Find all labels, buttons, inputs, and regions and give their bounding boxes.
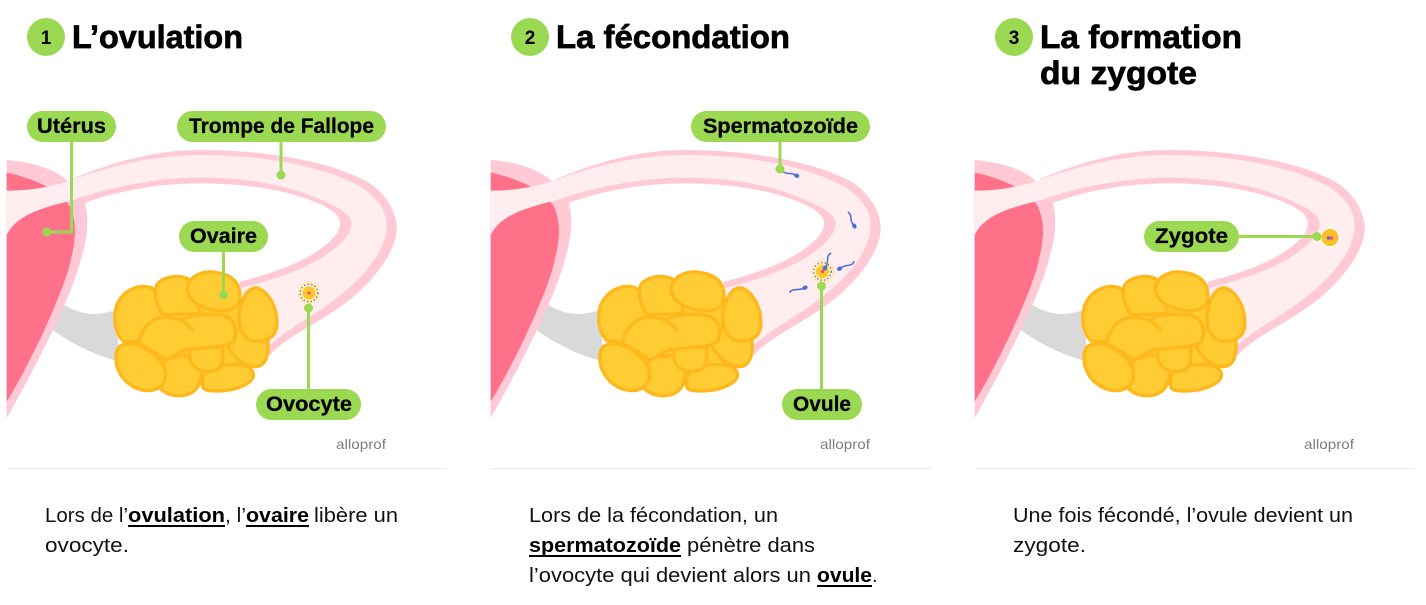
text block: zygote description: Une fois fécondé, l’ovule devient un xyxy=(1013,505,1353,527)
label: Ovaire xyxy=(179,221,268,300)
step number 1: 1 xyxy=(41,28,52,49)
text block: ovulation description: Lors de l’ xyxy=(45,505,128,527)
step number 2: 2 xyxy=(525,28,535,49)
text block: ovulation description: libère un xyxy=(314,505,398,527)
text block: ovulation description: ovocyte. xyxy=(45,535,129,557)
label: Utérus: Utérus xyxy=(37,115,106,138)
anatomy illustration: uterus, fallopian tube and ovary xyxy=(491,150,881,418)
heading: La fécondation: La fécondation xyxy=(556,19,790,55)
text block: fertilization description: ovule xyxy=(817,565,872,587)
text block: fertilization description: spermatozoïde xyxy=(529,535,681,557)
logo: alloprof: alloprof xyxy=(820,436,870,452)
label: Zygote xyxy=(1144,221,1322,252)
label: Ovule xyxy=(782,282,862,420)
text block: fertilization description: pénètre dans xyxy=(687,535,815,557)
label: Zygote: Zygote xyxy=(1155,225,1228,248)
text block: ovulation description: , l’ xyxy=(225,505,246,527)
logo: alloprof: alloprof xyxy=(336,436,386,452)
text block: zygote description: zygote. xyxy=(1013,535,1086,557)
step number 2 xyxy=(511,18,549,56)
icon: zygote xyxy=(1320,228,1340,248)
heading: La formation du zygote xyxy=(1040,19,1242,91)
panel: la fécondation xyxy=(491,18,931,587)
panel: la formation du zygote xyxy=(975,18,1415,557)
label: Spermatozoïde xyxy=(691,111,870,174)
step number 3: 3 xyxy=(1009,28,1019,49)
label: Spermatozoïde: Spermatozoïde xyxy=(703,115,858,138)
text block: ovulation description: ovaire xyxy=(246,505,309,527)
label: Utérus xyxy=(27,111,116,236)
label: Ovaire: Ovaire xyxy=(190,225,257,248)
label: Ovocyte xyxy=(256,304,361,420)
step number 3 xyxy=(995,18,1033,56)
text block: zygote description xyxy=(1013,505,1353,557)
icon: oocyte xyxy=(298,282,320,304)
text block: ovulation description xyxy=(45,505,398,557)
step number 1 xyxy=(27,18,65,56)
label: Ovule: Ovule xyxy=(793,393,851,416)
text block: ovulation description: ovulation xyxy=(128,505,225,527)
text block: fertilization description: . xyxy=(872,565,878,587)
heading: La formation du zygote: La formation xyxy=(1040,19,1242,55)
icon: spermatozoa xyxy=(783,172,856,292)
text block: fertilization description: Lors de la fécondation, un xyxy=(529,505,778,527)
text block: fertilization description: l’ovocyte qui devient alors un xyxy=(529,565,811,587)
label: Ovocyte: Ovocyte xyxy=(266,393,352,416)
anatomy illustration: uterus, fallopian tube and ovary xyxy=(975,150,1365,418)
panel: l'ovulation xyxy=(7,18,447,557)
icon: ovule xyxy=(812,260,834,282)
label: Trompe de Fallope xyxy=(177,111,386,180)
heading: L'ovulation: L’ovulation xyxy=(72,19,243,55)
logo: alloprof: alloprof xyxy=(1304,436,1354,452)
label: Trompe de Fallope: Trompe de Fallope xyxy=(189,115,374,138)
heading: La formation du zygote: du zygote xyxy=(1040,55,1197,91)
anatomy illustration: uterus, fallopian tube and ovary xyxy=(7,150,397,418)
text block: fertilization description xyxy=(529,505,878,587)
